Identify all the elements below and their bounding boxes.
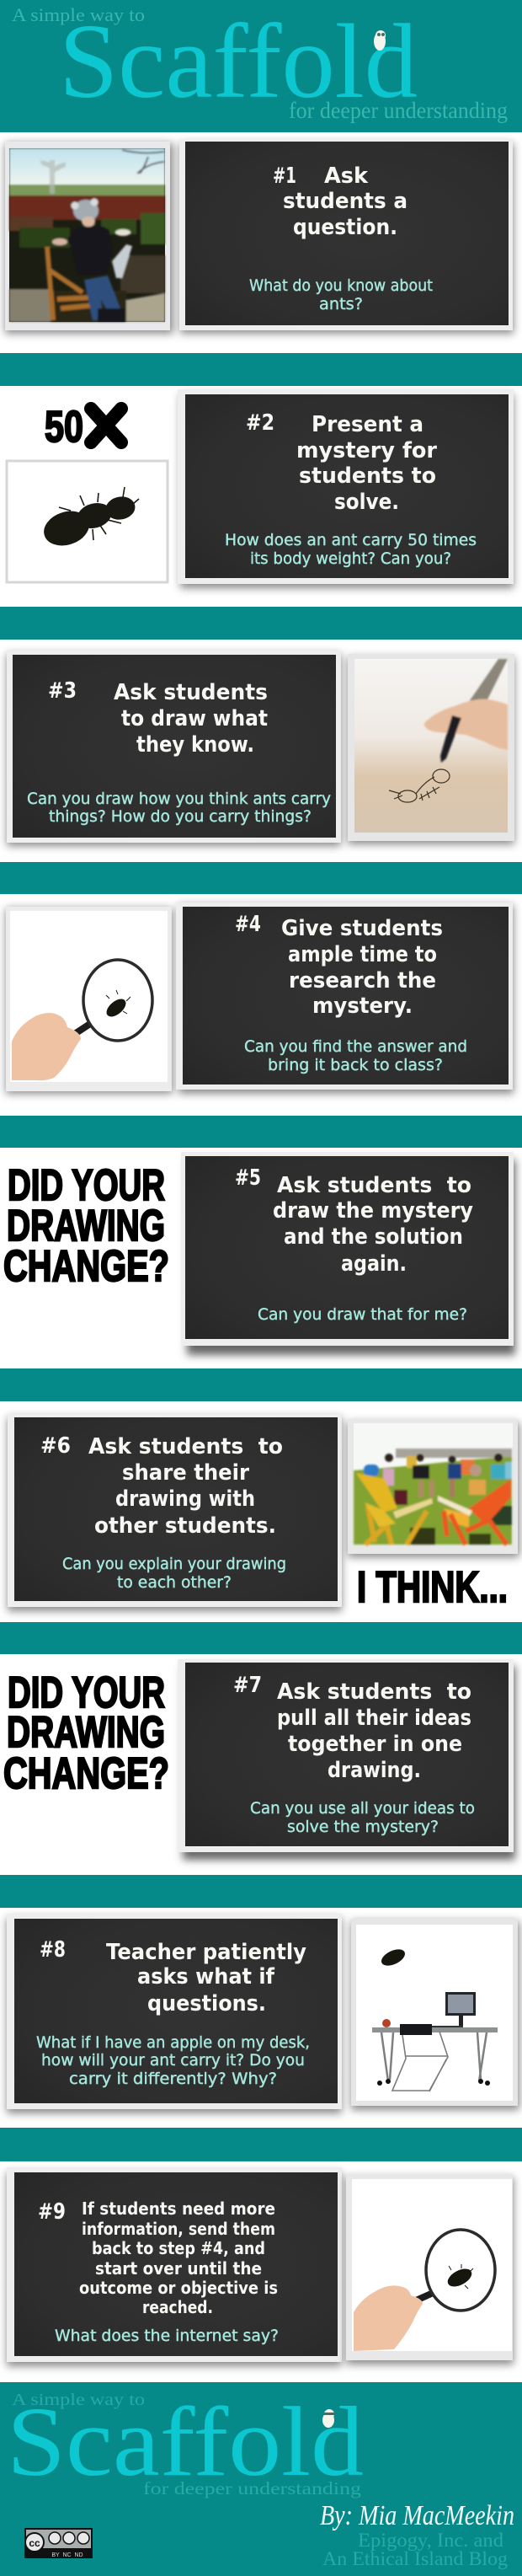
step 6 heading: Ask students to	[88, 1434, 283, 1459]
author affiliation: Epigogy, Inc. and	[358, 2530, 504, 2551]
author affiliation	[322, 2530, 509, 2569]
divider band 7	[0, 1875, 522, 1908]
step 5 question: Can you draw that for me?	[258, 1305, 467, 1324]
step 7 heading: together in one	[288, 1732, 462, 1757]
body	[67, 225, 112, 274]
step 4 question	[244, 1037, 467, 1074]
footer subtitle: for deeper understanding	[143, 2478, 362, 2498]
header title: Scaffold	[59, 3, 418, 120]
image: magnifying glass on ant (step 9)	[346, 2174, 514, 2364]
step 5 heading: Ask students to	[277, 1173, 471, 1198]
step 3 heading: they know.	[136, 732, 254, 758]
step 8 heading: questions.	[147, 1991, 266, 2016]
small ant	[104, 990, 130, 1020]
step 4 heading: Give students	[281, 916, 443, 941]
photo: student in koala hat	[5, 142, 173, 334]
step 6 heading: other students.	[94, 1513, 276, 1539]
step 2 heading: students to	[299, 463, 436, 489]
callout: did your drawing change (step 7): DRAWING	[7, 1708, 165, 1757]
step 4 heading: #4	[235, 912, 261, 937]
divider band 8	[0, 2128, 522, 2161]
step 9 heading: back to step #4, and	[92, 2238, 265, 2258]
step 9 heading: information, send them	[82, 2219, 275, 2239]
step 7 heading: pull all their ideas	[277, 1706, 471, 1731]
step 7 question: solve the mystery?	[287, 1818, 439, 1836]
step 9 heading: #9	[38, 2199, 66, 2225]
step 5 heading: again.	[341, 1251, 407, 1277]
step 2 question	[225, 531, 477, 568]
divider band 5	[0, 1368, 522, 1401]
callout: did your drawing change (step 5)	[3, 1161, 169, 1291]
footer banner	[0, 2382, 522, 2576]
step 8 question: carry it differently? Why?	[69, 2070, 277, 2088]
step 6 heading: drawing with	[115, 1486, 255, 1512]
step 3 question: Can you draw how you think ants carry	[27, 790, 331, 808]
panel: step 4 chalkboard	[176, 902, 514, 1094]
yellow chair	[356, 1473, 397, 1513]
image: ant and desk	[351, 1919, 519, 2110]
step 9 heading: If students need more	[82, 2198, 275, 2219]
panel: step 3 chalkboard	[7, 651, 341, 846]
icon: creative commons badge: cc	[29, 2537, 40, 2549]
step 8 heading: asks what if	[137, 1964, 275, 1990]
step 8 heading: Teacher patiently	[106, 1940, 306, 1965]
callout: did your drawing change (step 5): DRAWING	[7, 1202, 165, 1251]
step 6 heading: share their	[122, 1460, 249, 1486]
image: hand drawing an ant	[348, 654, 514, 844]
step 4 question: Can you find the answer and	[244, 1037, 467, 1056]
step 6 question	[62, 1555, 286, 1592]
step 2 heading: Present a	[312, 412, 423, 437]
panel: step 5 chalkboard	[181, 1152, 515, 1355]
panel: step 6 chalkboard	[8, 1414, 342, 1611]
step 5 heading: #5	[235, 1165, 261, 1191]
panel: step 9 chalkboard	[7, 2167, 342, 2366]
step 9 heading: outcome or objective is	[79, 2278, 278, 2298]
step 3 heading	[48, 678, 268, 758]
step 2 heading: mystery for	[296, 438, 437, 463]
step 2 heading: solve.	[334, 490, 399, 515]
step 4 heading: ample time to	[288, 942, 437, 967]
step 9 heading	[38, 2198, 278, 2317]
divider band 1	[0, 353, 522, 386]
step 9 question: What does the internet say?	[55, 2327, 279, 2345]
step 3 heading: Ask students	[114, 680, 268, 705]
icon: owl	[374, 30, 386, 51]
divider band 4	[0, 1116, 522, 1148]
step 6 heading: #6	[40, 1433, 71, 1459]
step 7 heading: #7	[233, 1673, 262, 1698]
footer kicker: A simple way to	[12, 2391, 145, 2409]
step 5 heading	[235, 1165, 473, 1277]
step 8 heading	[40, 1937, 306, 2016]
author affiliation: An Ethical Island Blog	[322, 2548, 509, 2569]
image: magnifying glass on ant	[6, 907, 173, 1094]
step 1 question	[249, 276, 433, 313]
step 3 heading: to draw what	[121, 706, 268, 731]
step 7 heading: Ask students to	[277, 1679, 471, 1705]
step 3 heading: #3	[48, 678, 77, 704]
step 7 question	[250, 1799, 475, 1836]
step 7 question: Can you use all your ideas to	[250, 1799, 475, 1818]
step 1 heading	[273, 163, 407, 240]
icon: owl	[322, 2409, 334, 2428]
step 4 heading	[235, 912, 443, 1019]
panel: step 7 chalkboard	[178, 1659, 515, 1860]
panel: step 8 chalkboard	[7, 1914, 342, 2113]
image: ant	[7, 461, 168, 582]
panel: step 2 chalkboard	[178, 389, 514, 588]
step 4 question: bring it back to class?	[268, 1056, 443, 1074]
icon: creative commons badge	[24, 2528, 93, 2558]
panel: step 1 chalkboard	[179, 139, 514, 334]
step 1 heading: students a	[283, 189, 407, 214]
step 1 question: What do you know about	[249, 276, 433, 295]
step 1 heading: #1	[273, 163, 296, 189]
step 8 heading: #8	[40, 1937, 66, 1963]
orange chair	[469, 1479, 511, 1525]
hand and handle	[12, 1013, 93, 1080]
divider band 2	[0, 607, 522, 640]
step 2 heading: #2	[246, 410, 274, 436]
divider band 3	[0, 862, 522, 894]
divider band 6	[0, 1622, 522, 1654]
small ant	[379, 1946, 407, 1969]
callout: did your drawing change (step 7): DID YOUR	[8, 1668, 165, 1717]
callout: did your drawing change (step 5): DID YOUR	[8, 1161, 165, 1210]
step 6 question: to each other?	[117, 1573, 232, 1592]
step 8 question	[36, 2033, 310, 2088]
callout: did your drawing change (step 7): CHANGE?	[3, 1749, 169, 1798]
step 9 heading: reached.	[142, 2297, 213, 2317]
step 5 heading: and the solution	[284, 1224, 463, 1250]
label: 50X	[45, 403, 121, 452]
step 6 heading	[40, 1433, 283, 1539]
desk	[372, 1992, 498, 2091]
step 7 heading: drawing.	[328, 1758, 421, 1783]
icon: creative commons badge: BY NC ND	[51, 2552, 83, 2558]
label: 50X: 50	[45, 403, 83, 452]
back chairs	[364, 1465, 379, 1476]
step 8 question: how will your ant carry it? Do you	[41, 2051, 305, 2070]
hand and handle	[354, 2285, 431, 2351]
people	[383, 1469, 394, 1486]
footer title: Scaffold	[7, 2386, 364, 2497]
step 7 heading	[233, 1673, 471, 1783]
step 1 heading: question.	[293, 215, 397, 240]
step 3 question: things? How do you carry things?	[49, 807, 312, 826]
header kicker: A simple way to	[12, 4, 145, 25]
step 1 question: ants?	[319, 295, 363, 313]
step 4 heading: mystery.	[312, 993, 413, 1019]
step 8 question: What if I have an apple on my desk,	[36, 2033, 310, 2052]
callout: did your drawing change (step 7)	[3, 1668, 169, 1798]
step 9 heading: start over until the	[95, 2258, 262, 2279]
bag	[112, 244, 132, 278]
step 2 question: its body weight? Can you?	[250, 549, 451, 568]
header subtitle: for deeper understanding	[289, 98, 508, 123]
step 2 heading	[246, 410, 437, 515]
callout: did your drawing change (step 5): CHANGE?	[3, 1242, 169, 1291]
step 1 heading: Ask	[324, 163, 369, 189]
photo: students in adirondack chairs	[348, 1419, 519, 1557]
bench	[47, 247, 96, 320]
shadows	[410, 1528, 435, 1545]
step 3 question	[27, 790, 331, 826]
header banner	[0, 0, 522, 132]
small ant	[445, 2264, 474, 2289]
step 4 heading: research the	[289, 968, 436, 993]
step 6 question: Can you explain your drawing	[62, 1555, 286, 1573]
step 2 question: How does an ant carry 50 times	[225, 531, 477, 549]
step 5 heading: draw the mystery	[273, 1198, 473, 1224]
